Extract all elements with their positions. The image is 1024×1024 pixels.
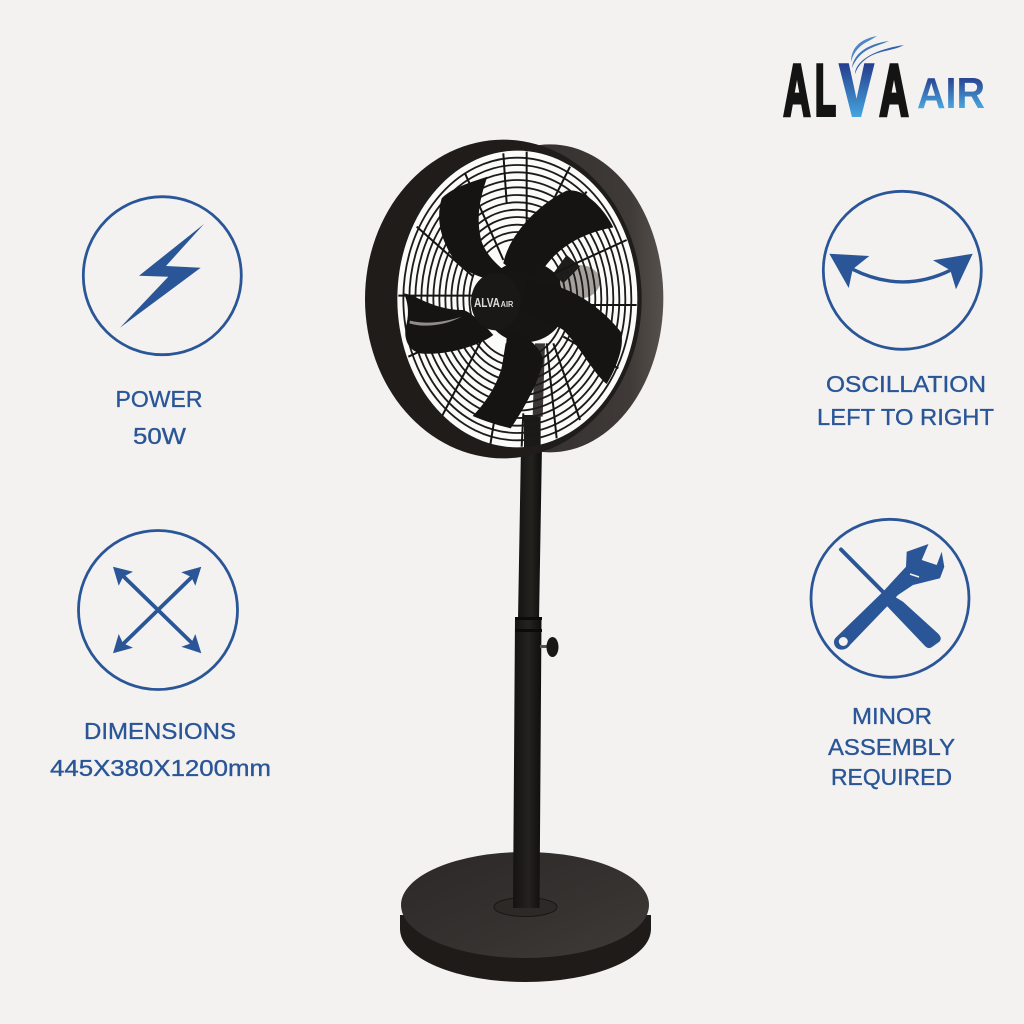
grille interior	[397, 150, 638, 448]
label: power 50W	[116, 386, 202, 449]
front ring	[365, 140, 642, 458]
icon: curved double arrow in circle	[823, 191, 981, 349]
label: minor assembly required: ASSEMBLY	[828, 734, 955, 760]
hub with logo: AIR	[501, 300, 514, 309]
label: dimensions: DIMENSIONS	[84, 718, 236, 744]
wrench	[834, 544, 944, 650]
fan blades	[404, 177, 622, 428]
label: dimensions: 445X380X1200mm	[50, 755, 271, 781]
grille wires	[403, 158, 631, 440]
panel: dimensions	[50, 530, 271, 781]
logo wordmark ALVA: A	[784, 51, 810, 131]
brand logo	[784, 36, 985, 131]
height adjustment knob	[540, 637, 558, 657]
grille spokes	[398, 152, 637, 447]
light streak on left blade	[409, 317, 462, 326]
motor behind blades	[483, 255, 600, 448]
logo swoosh	[851, 36, 904, 74]
logo wordmark ALVA	[784, 51, 908, 131]
hub with logo: ALVA	[474, 295, 500, 310]
label: minor assembly required: REQUIRED	[831, 764, 952, 790]
label: minor assembly required: MINOR	[852, 703, 932, 729]
logo wordmark AIR: AIR	[917, 69, 985, 118]
fan base	[400, 852, 651, 982]
fan head	[365, 140, 663, 458]
rear housing	[437, 144, 663, 452]
icon: diagonal arrows in circle	[78, 530, 238, 690]
panel: minor assembly	[811, 519, 969, 790]
label: oscillation: LEFT TO RIGHT	[817, 404, 994, 430]
label: power 50W: POWER	[116, 386, 202, 412]
fan pole	[513, 445, 542, 908]
logo wordmark ALVA: L	[815, 51, 836, 131]
label: oscillation: OSCILLATION	[826, 371, 986, 397]
label: minor assembly required	[828, 703, 955, 790]
label: dimensions	[50, 718, 271, 781]
label: oscillation	[817, 371, 994, 430]
icon: lightning bolt in circle	[83, 197, 241, 355]
product: pedestal fan	[365, 140, 663, 982]
panel: oscillation	[817, 191, 994, 430]
panel: power	[83, 197, 241, 449]
icon: wrench and screwdriver in circle	[811, 519, 969, 677]
label: power 50W: 50W	[133, 423, 187, 449]
logo wordmark ALVA: A	[880, 51, 908, 131]
logo wordmark ALVA: V	[840, 51, 873, 131]
hub with logo	[471, 273, 520, 330]
screwdriver	[841, 550, 941, 648]
